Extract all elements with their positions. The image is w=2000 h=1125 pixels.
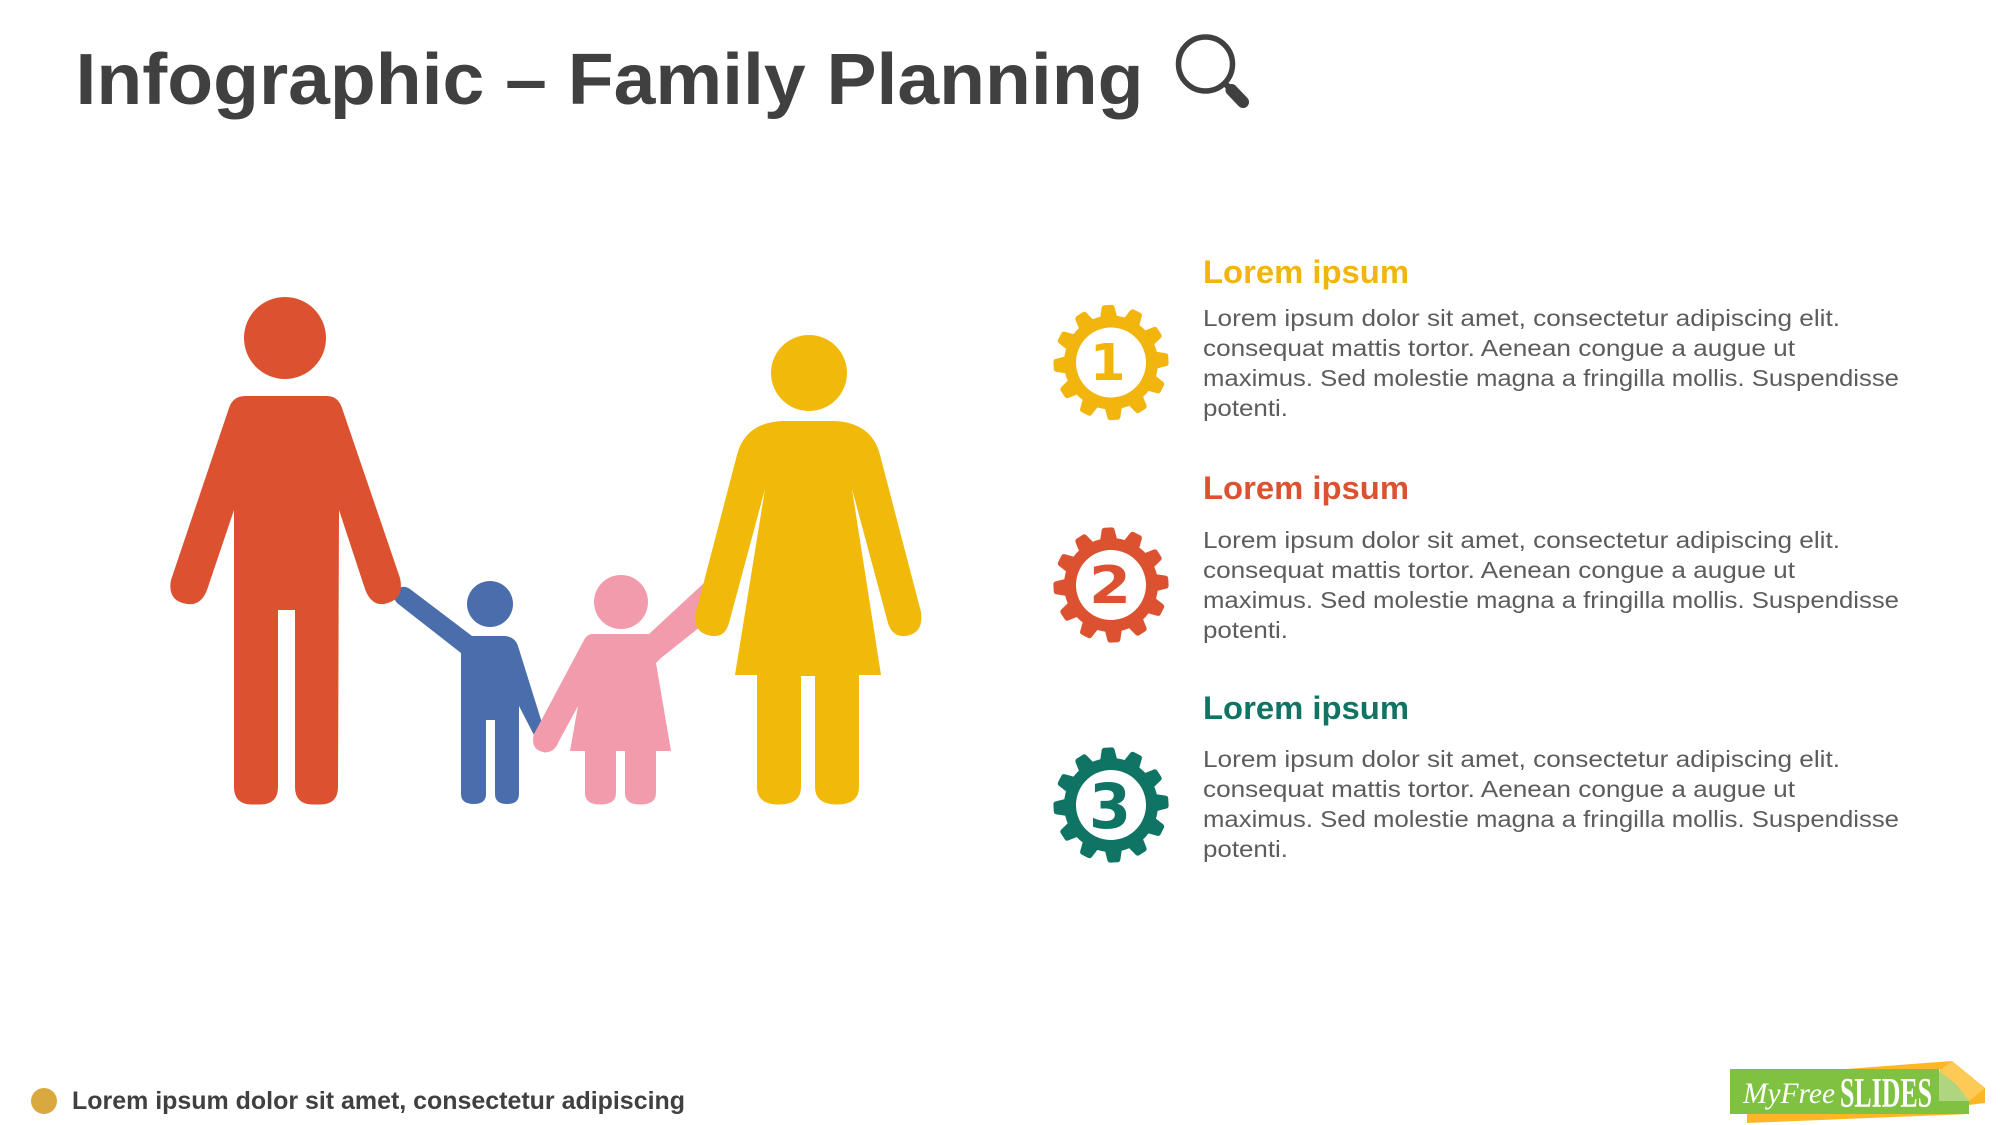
icon: gear 3: 3: [1089, 770, 1131, 843]
logo: MyFree Slides: [1730, 1061, 1985, 1123]
icon: gear 2: [1051, 525, 1171, 645]
text block 1: consequat mattis tortor. Aenean congue a augue ut: [1203, 335, 1796, 361]
icon: gear 1: 1: [1090, 334, 1126, 393]
figure: father: [170, 297, 401, 804]
text block 1: Lorem ipsum dolor sit amet, consectetur adipiscing elit.: [1203, 305, 1840, 331]
text block 2: consequat mattis tortor. Aenean congue a augue ut: [1203, 557, 1796, 583]
figure: boy: [394, 581, 548, 804]
icon: gear 1: [1051, 302, 1171, 423]
text block 2: potenti.: [1203, 617, 1288, 643]
figure: girl: [533, 575, 710, 804]
text block 2: [1203, 527, 1899, 643]
item 1: [1051, 254, 1899, 423]
text block 1: maximus. Sed molestie magna a fringilla mollis. Suspendisse: [1203, 365, 1899, 391]
figure: mother: [695, 335, 921, 804]
text block 3: consequat mattis tortor. Aenean congue a augue ut: [1203, 776, 1796, 802]
heading 3: Lorem ipsum: [1203, 690, 1409, 726]
logo: MyFree Slides: SLIDES: [1840, 1071, 1932, 1117]
item 2: [1051, 470, 1899, 645]
icon: gear 3: [1051, 745, 1171, 865]
icon: magnifying glass: [1178, 37, 1243, 102]
logo: MyFree Slides: MyFree: [1742, 1077, 1835, 1110]
text block 3: maximus. Sed molestie magna a fringilla mollis. Suspendisse: [1203, 806, 1899, 832]
text block 2: Lorem ipsum dolor sit amet, consectetur adipiscing elit.: [1203, 527, 1840, 553]
footer bullet: [31, 1088, 57, 1114]
icon: gear 2: 2: [1089, 556, 1131, 616]
text block 3: potenti.: [1203, 836, 1288, 862]
text block 1: [1203, 305, 1899, 421]
family illustration: [170, 297, 921, 804]
footer text: Lorem ipsum dolor sit amet, consectetur adipiscing: [72, 1087, 685, 1115]
footer note: [31, 1087, 685, 1115]
title: Infographic – Family Planning: [76, 40, 1144, 120]
text block 1: potenti.: [1203, 395, 1288, 421]
heading 2: Lorem ipsum: [1203, 470, 1409, 506]
heading 1: Lorem ipsum: [1203, 254, 1409, 290]
text block 2: maximus. Sed molestie magna a fringilla mollis. Suspendisse: [1203, 587, 1899, 613]
text block 3: Lorem ipsum dolor sit amet, consectetur adipiscing elit.: [1203, 746, 1840, 772]
text block 3: [1203, 746, 1899, 862]
item 3: [1051, 690, 1899, 865]
